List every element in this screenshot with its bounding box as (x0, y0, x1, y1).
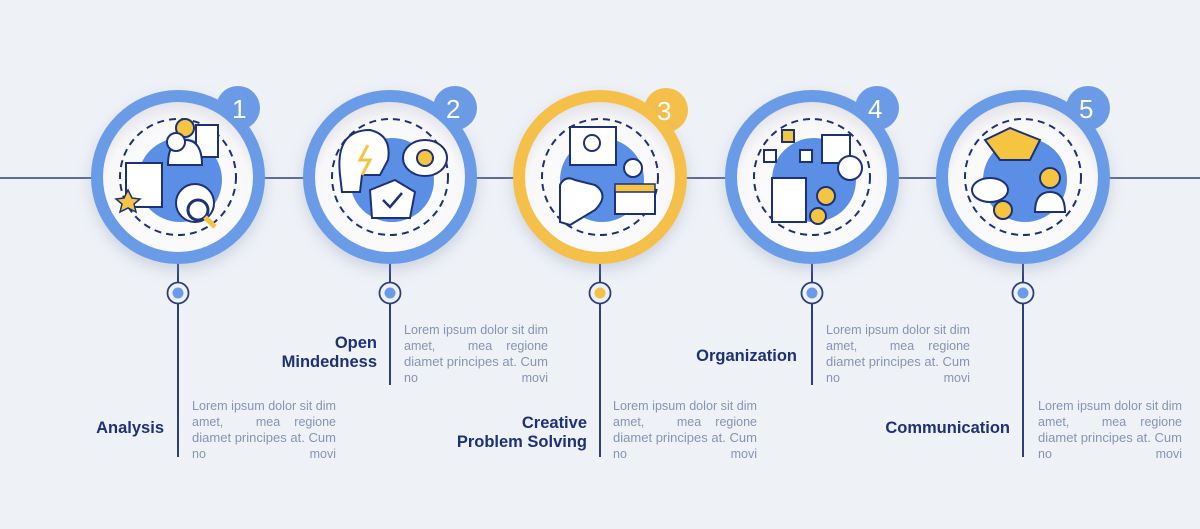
text block 4: diamet principes at. Cum (826, 355, 970, 369)
icon: open mindedness (332, 119, 448, 235)
step 2 circle (303, 86, 477, 264)
text block 4: amet, (826, 339, 857, 353)
text block 3: mea (677, 415, 701, 429)
text block 4: movi (944, 371, 970, 385)
text block 2: amet, (404, 339, 435, 353)
text block 2: no (404, 371, 418, 385)
step 4 circle (725, 86, 899, 264)
dots (168, 282, 1034, 304)
text block 1: regione (294, 415, 336, 429)
text block 5: Lorem ipsum dolor sit dim (1038, 399, 1182, 413)
text block 5: no (1038, 447, 1052, 461)
text block 1: Lorem ipsum dolor sit dim (192, 399, 336, 413)
text block 3: amet, (613, 415, 644, 429)
step 2 circle: 2 (446, 94, 460, 124)
step 1 circle: 1 (232, 94, 246, 124)
timeline line (0, 177, 1200, 179)
text block 2: mea (468, 339, 492, 353)
text block 1: no (192, 447, 206, 461)
title: Open Mindedness: Open (335, 334, 377, 352)
text block 3: movi (731, 447, 757, 461)
step 4 circle: 4 (868, 94, 882, 124)
text block 4: no (826, 371, 840, 385)
text block 1: diamet principes at. Cum (192, 431, 336, 445)
icon: analysis (116, 119, 236, 235)
text block 2 (404, 323, 548, 385)
text block 2: diamet principes at. Cum (404, 355, 548, 369)
title: Organization: Organization (696, 347, 797, 365)
icon: creative problem solving (542, 119, 658, 235)
icon: communication (965, 119, 1081, 235)
title: Communication: Communication (885, 419, 1010, 437)
text block 2: Lorem ipsum dolor sit dim (404, 323, 548, 337)
title: Open Mindedness: Mindedness (282, 353, 377, 371)
text block 3 (613, 399, 757, 461)
step 3 circle (513, 88, 688, 264)
text block 5: mea (1102, 415, 1126, 429)
text block 4 (826, 323, 970, 385)
text block 4: regione (928, 339, 970, 353)
text block 3: diamet principes at. Cum (613, 431, 757, 445)
text block 5: diamet principes at. Cum (1038, 431, 1182, 445)
title: Creative Problem Solving: Creative (522, 414, 587, 432)
text block 1: mea (256, 415, 280, 429)
text block 4: Lorem ipsum dolor sit dim (826, 323, 970, 337)
text block 2: movi (522, 371, 548, 385)
icon: organization (754, 119, 870, 235)
text block 2: regione (506, 339, 548, 353)
vertical connectors (178, 262, 1023, 457)
title: Analysis: Analysis (96, 419, 164, 437)
text block 5: amet, (1038, 415, 1069, 429)
text block 1: movi (310, 447, 336, 461)
step 5 circle (936, 86, 1110, 264)
text block 1 (192, 399, 336, 461)
text block 5 (1038, 399, 1182, 461)
text block 1: amet, (192, 415, 223, 429)
step 1 circle (91, 86, 265, 264)
step 3 circle: 3 (657, 96, 671, 126)
text block 3: regione (715, 415, 757, 429)
step 5 circle: 5 (1079, 94, 1093, 124)
text block 3: no (613, 447, 627, 461)
text block 5: movi (1156, 447, 1182, 461)
text block 3: Lorem ipsum dolor sit dim (613, 399, 757, 413)
text block 5: regione (1140, 415, 1182, 429)
title: Creative Problem Solving: Problem Solving (457, 433, 587, 451)
text block 4: mea (890, 339, 914, 353)
